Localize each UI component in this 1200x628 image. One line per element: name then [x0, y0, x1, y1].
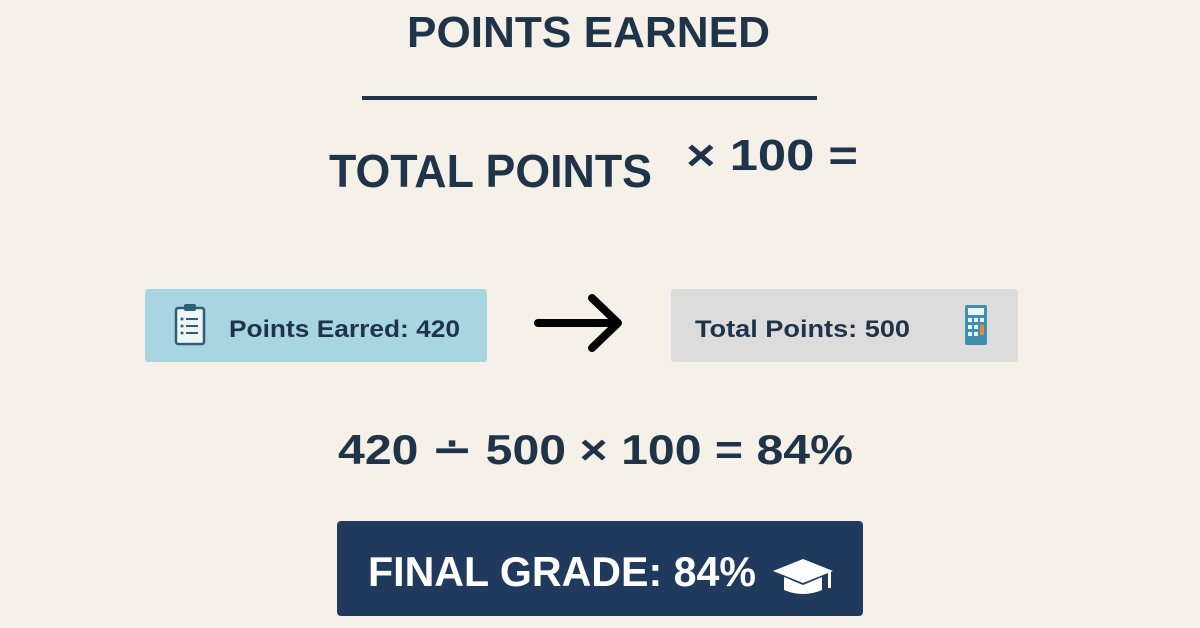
panel: points earned box: Points Earred: 420 — [229, 316, 460, 343]
panel: final grade: FINAL GRADE: 84% — [368, 548, 756, 595]
panel: total points box — [671, 289, 1018, 362]
panel: total points box: Total Points: 500 — [695, 316, 910, 343]
panel: points earned box — [145, 289, 487, 362]
denominator: total points: TOTAL POINTS — [329, 145, 652, 197]
title: points earned: POINTS EARNED — [407, 8, 770, 57]
arrow — [538, 298, 618, 348]
equation: 420 ∸ 500 × 100 = 84% — [338, 426, 853, 473]
multiplier text: × 100 = — [686, 131, 858, 180]
icon: calculator — [965, 305, 987, 345]
icon: clipboard — [176, 304, 204, 344]
icon: graduation cap — [773, 559, 833, 594]
panel: final grade — [337, 521, 863, 616]
